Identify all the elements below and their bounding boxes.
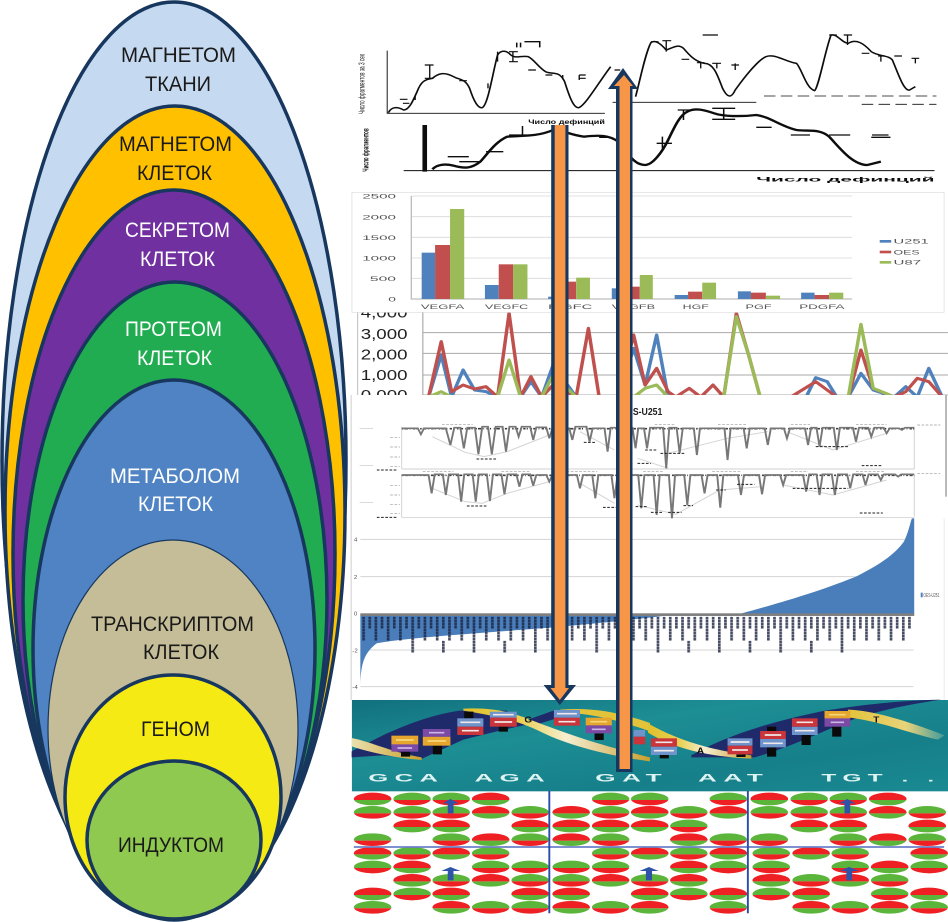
strands right	[648, 700, 945, 759]
panel: DNA helix	[352, 700, 948, 791]
ellipse: genome	[65, 675, 281, 919]
line series: green	[429, 317, 942, 397]
chart: curve three axis	[764, 96, 936, 104]
arrow: upward	[608, 68, 638, 772]
waterfall chart: 0	[354, 612, 357, 618]
negative area	[360, 615, 672, 687]
category labels: VEGFB	[612, 303, 655, 311]
category labels: VEGFC	[485, 303, 528, 311]
waterfall chart: -2	[352, 649, 358, 654]
chart: curve one: Число дефинций	[528, 118, 605, 126]
value axis labels: 500	[370, 275, 396, 283]
category labels: PDGFA	[799, 303, 845, 311]
ellipse: cell metabolome: МЕТАБОЛОМ	[110, 465, 240, 488]
strand letters: A	[697, 746, 704, 755]
category labels	[421, 303, 845, 311]
line series: blue	[429, 335, 942, 397]
bars: U87	[450, 209, 843, 299]
chart: curve one	[357, 42, 620, 126]
ellipse: tissue magnetome	[2, 2, 346, 920]
spectrum: top	[360, 424, 940, 470]
sequence text: GCA	[368, 773, 444, 784]
value axis labels: 2500	[362, 193, 396, 201]
arrow: downward	[544, 125, 576, 705]
row 6	[354, 861, 948, 873]
ellipse: tissue magnetome: МАГНЕТОМ	[121, 44, 236, 67]
panel: magnetic curves	[357, 35, 936, 184]
panel: spectra and waterfall	[351, 395, 947, 700]
strand letters: G	[524, 715, 532, 724]
icon: blue up arrows	[441, 799, 859, 880]
bars: OES	[435, 245, 829, 299]
ellipse: cell secretome	[13, 190, 335, 918]
value axis labels: 2000	[362, 214, 396, 221]
row 3	[393, 820, 946, 832]
category labels: VEGFA	[421, 303, 465, 311]
sequence text: AGA	[475, 773, 551, 784]
nested ellipse diagram	[2, 2, 346, 920]
base pairs	[368, 710, 940, 784]
axis labels: 0,000	[361, 388, 408, 404]
sequence text: GAT	[595, 773, 668, 784]
strand letters	[524, 715, 880, 755]
ellipse: cell secretome: КЛЕТОК	[140, 248, 216, 271]
sequence text: TGT . .	[821, 773, 940, 784]
sequence text: AAT	[698, 773, 769, 784]
row 7	[393, 874, 908, 887]
waterfall legend	[921, 592, 940, 599]
value axis labels: 1500	[362, 234, 396, 242]
spectra title: OES-U251	[620, 407, 662, 418]
ellipse: cell proteome: ПРОТЕОМ	[125, 318, 222, 341]
strand letters: T	[873, 715, 880, 724]
row 9	[354, 901, 948, 914]
positive area	[741, 518, 914, 615]
ellipse: cell transcriptome	[48, 540, 298, 918]
row 8	[354, 888, 948, 900]
ellipse: cell metabolome: КЛЕТОК	[138, 493, 214, 516]
row 2	[354, 806, 946, 819]
ellipse: cell proteome: КЛЕТОК	[137, 347, 213, 370]
strands left	[352, 708, 650, 761]
axis labels	[361, 306, 408, 404]
waterfall chart: -4	[352, 685, 359, 691]
ellipse: cell proteome	[23, 282, 327, 918]
chart: curve four: Число дефинций	[756, 176, 935, 184]
ellipse: tissue magnetome: ТКАНИ	[145, 73, 211, 96]
waterfall chart	[352, 518, 940, 691]
category labels: PGF	[746, 303, 773, 311]
row 5	[354, 847, 948, 860]
sequence text	[368, 773, 940, 784]
zero band	[360, 613, 914, 616]
legend	[880, 238, 929, 267]
panel: chromosome grid	[354, 791, 948, 914]
line series: red	[429, 313, 942, 397]
ellipse: inductome: ИНДУКТОМ	[118, 834, 224, 857]
panel: bar chart	[352, 192, 944, 312]
axis labels: 4,000	[361, 306, 408, 321]
ellipse: cell transcriptome: ТРАНСКРИПТОМ	[91, 613, 254, 636]
gene labels	[361, 617, 913, 653]
category labels: HGF	[683, 303, 710, 311]
legend: U251	[894, 238, 929, 246]
value axis labels	[362, 193, 396, 303]
ellipse: cell metabolome	[33, 380, 315, 918]
DNA background	[352, 700, 948, 791]
chart: curve four	[361, 108, 935, 184]
row 4	[354, 833, 946, 846]
legend: OES	[894, 249, 920, 256]
axis labels: 1,000	[361, 368, 408, 384]
ellipse: inductome	[87, 761, 261, 919]
value axis labels: 0	[388, 296, 396, 303]
ellipse: cell magnetome: КЛЕТОК	[137, 162, 213, 185]
category labels: FIGFC	[548, 303, 592, 311]
ellipse: genome: ГЕНОМ	[141, 718, 210, 741]
axis labels: 2,000	[361, 347, 408, 363]
chart: curve two	[613, 35, 919, 102]
spectrum: bottom	[360, 472, 940, 518]
chart: curve one: Число фрагментов за 3 сек	[357, 54, 367, 114]
ellipse: cell secretome: СЕКРЕТОМ	[125, 219, 230, 242]
row 1	[354, 793, 907, 805]
bars: U251	[422, 253, 815, 299]
grid lines	[354, 791, 944, 913]
legend: U87	[894, 259, 921, 267]
panel: line chart	[358, 306, 948, 404]
axis labels: 3,000	[361, 327, 408, 343]
chart: curve four: Число фрагментов	[361, 128, 371, 172]
waterfall chart: 2	[354, 575, 357, 581]
value axis labels: 1000	[362, 255, 396, 263]
waterfall chart: 4	[354, 538, 358, 544]
ellipse: cell magnetome	[5, 106, 345, 918]
ellipse: cell transcriptome: КЛЕТОК	[143, 641, 220, 664]
ellipse: cell magnetome: МАГНЕТОМ	[119, 133, 232, 156]
